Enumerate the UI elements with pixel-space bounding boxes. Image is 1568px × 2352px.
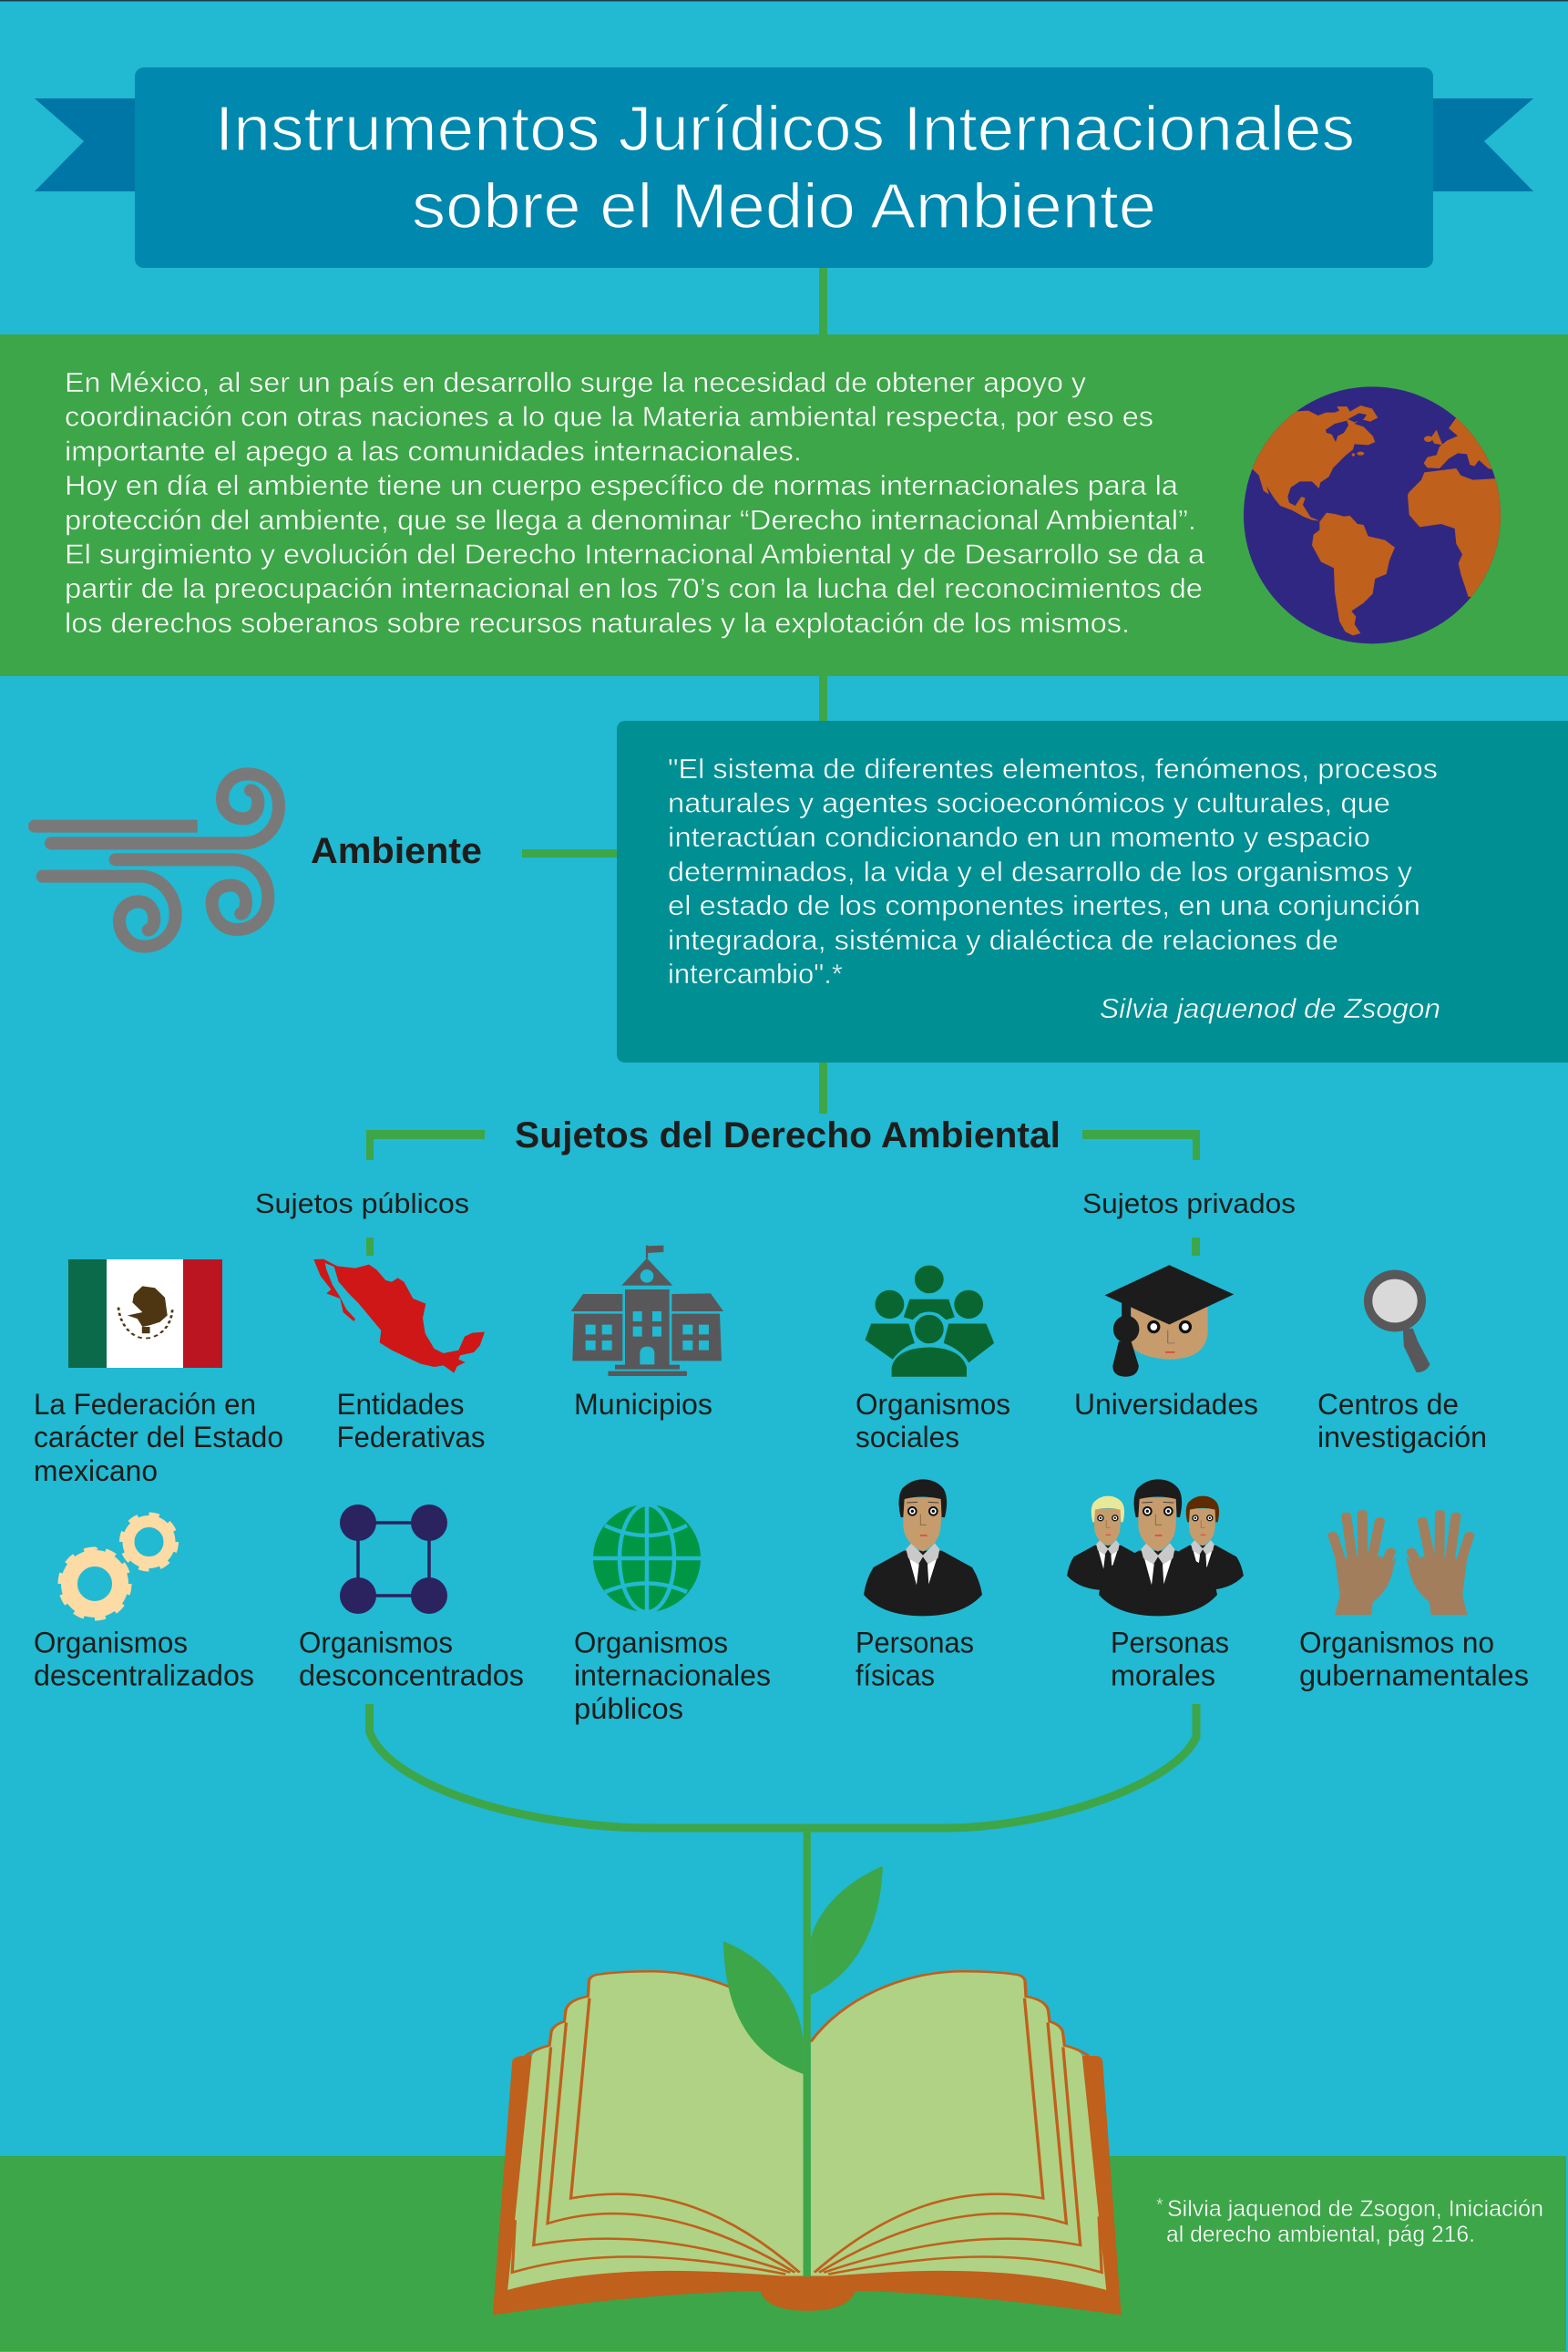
- labels: first row: Centros de: [1317, 1388, 1459, 1421]
- icon: gears: [61, 1515, 176, 1618]
- labels: second row: Organismos: [299, 1626, 453, 1659]
- icon: two hands: [1333, 1514, 1470, 1615]
- quote text: [668, 754, 1438, 990]
- panel: definition quote: [617, 721, 1568, 1063]
- connector curve: [370, 1704, 1196, 1828]
- footnote: [1156, 2195, 1543, 2247]
- icon: green globe: [593, 1505, 701, 1612]
- icon: earth globe: [1242, 386, 1503, 643]
- icon: graduate: [1105, 1265, 1234, 1377]
- heading: Sujetos del Derecho Ambiental: Sujetos del Derecho Ambiental: [515, 1115, 1061, 1155]
- bottom green band: [0, 2156, 1566, 2351]
- labels: first row: investigación: [1317, 1421, 1487, 1453]
- labels: second row: descentralizados: [34, 1659, 254, 1691]
- labels: first row: Entidades: [337, 1388, 465, 1421]
- subheading: Sujetos privados: Sujetos privados: [1082, 1187, 1296, 1219]
- labels: second row: gubernamentales: [1299, 1659, 1529, 1691]
- intro text: [65, 367, 1204, 639]
- intro text: coordinación con otras naciones a lo que la Materia ambiental respecta, por eso es: [65, 402, 1153, 433]
- labels: first row: Municipios: [574, 1388, 712, 1421]
- quote text: determinados, la vida y el desarrollo de los organismos y: [668, 857, 1413, 888]
- title: sobre el Medio Ambiente: [412, 170, 1156, 241]
- labels: first row: Universidades: [1074, 1388, 1258, 1421]
- intro text: Hoy en día el ambiente tiene un cuerpo específico de normas internacionales para la: [65, 470, 1178, 501]
- footnote: al derecho ambiental, pág 216.: [1166, 2222, 1475, 2247]
- intro text: partir de la preocupación internacional en los 70’s con la lucha del reconocimientos de: [65, 573, 1203, 604]
- labels: first row: La Federación en: [34, 1388, 256, 1421]
- labels: first row: mexicano: [34, 1454, 158, 1487]
- labels: first row: sociales: [856, 1421, 959, 1453]
- labels: second row: desconcentrados: [299, 1659, 524, 1691]
- book cover: [493, 2054, 1122, 2315]
- labels: second row: Organismos: [34, 1626, 188, 1659]
- quote text: el estado de los componentes inertes, en una conjunción: [668, 890, 1420, 921]
- labels: second row: físicas: [856, 1659, 935, 1691]
- labels: first row: carácter del Estado: [34, 1421, 283, 1453]
- icon: municipal building: [571, 1246, 723, 1376]
- quote author: Silvia jaquenod de Zsogon: [1100, 993, 1440, 1024]
- bracket lines: [366, 1130, 1200, 1256]
- intro text: protección del ambiente, que se llega a denominar “Derecho internacional Ambiental”.: [65, 505, 1196, 536]
- labels: second row: públicos: [574, 1692, 683, 1725]
- heading: Ambiente: Ambiente: [311, 831, 482, 871]
- intro text: importante el apego a las comunidades internacionales.: [65, 436, 802, 467]
- intro text: En México, al ser un país en desarrollo surge la necesidad de obtener apoyo y: [65, 367, 1087, 398]
- labels: second row: [34, 1626, 1529, 1725]
- quote text: "El sistema de diferentes elementos, fenómenos, procesos: [668, 754, 1438, 785]
- connector lines: [522, 268, 827, 1114]
- quote text: interactúan condicionando en un momento y espacio: [668, 822, 1370, 853]
- subheading: Sujetos públicos: Sujetos públicos: [255, 1187, 469, 1219]
- intro text: los derechos soberanos sobre recursos naturales y la explotación de los mismos.: [65, 608, 1130, 639]
- labels: second row: Organismos no: [1299, 1626, 1494, 1659]
- title: [215, 93, 1355, 241]
- icon: person: [864, 1479, 982, 1616]
- quote text: naturales y agentes socioeconómicos y culturales, que: [668, 787, 1390, 818]
- title ribbon: [35, 67, 1533, 268]
- footnote: Silvia jaquenod de Zsogon, Iniciación: [1167, 2196, 1543, 2222]
- icon: wind: [28, 774, 279, 947]
- icon: Mexican flag: [68, 1259, 222, 1368]
- icon: magnifying glass: [1364, 1270, 1430, 1372]
- title: Instrumentos Jurídicos Internacionales: [215, 93, 1355, 164]
- illustration: open book with plant: [493, 1825, 1122, 2315]
- labels: first row: Federativas: [337, 1421, 485, 1453]
- labels: second row: Organismos: [574, 1626, 728, 1659]
- panel: introduction: [0, 334, 1568, 676]
- icon: network of nodes: [340, 1505, 447, 1614]
- intro text: El surgimiento y evolución del Derecho Internacional Ambiental y de Desarrollo se da a: [65, 539, 1204, 570]
- icon: map of Mexico: [313, 1259, 485, 1373]
- labels: second row: morales: [1111, 1659, 1215, 1691]
- labels: second row: internacionales: [574, 1659, 771, 1691]
- quote text: integradora, sistémica y dialéctica de relaciones de: [668, 925, 1338, 956]
- icon: social organisations: [866, 1266, 994, 1377]
- labels: second row: Personas: [856, 1626, 974, 1659]
- plant stem and leaves: [723, 1825, 883, 2276]
- icon: group of people: [1067, 1479, 1244, 1616]
- labels: first row: [34, 1388, 1487, 1487]
- quote text: intercambio".*: [668, 959, 843, 990]
- footnote: *: [1156, 2195, 1163, 2215]
- labels: first row: Organismos: [856, 1388, 1010, 1421]
- book pages: [507, 1971, 1106, 2290]
- labels: second row: Personas: [1111, 1626, 1229, 1659]
